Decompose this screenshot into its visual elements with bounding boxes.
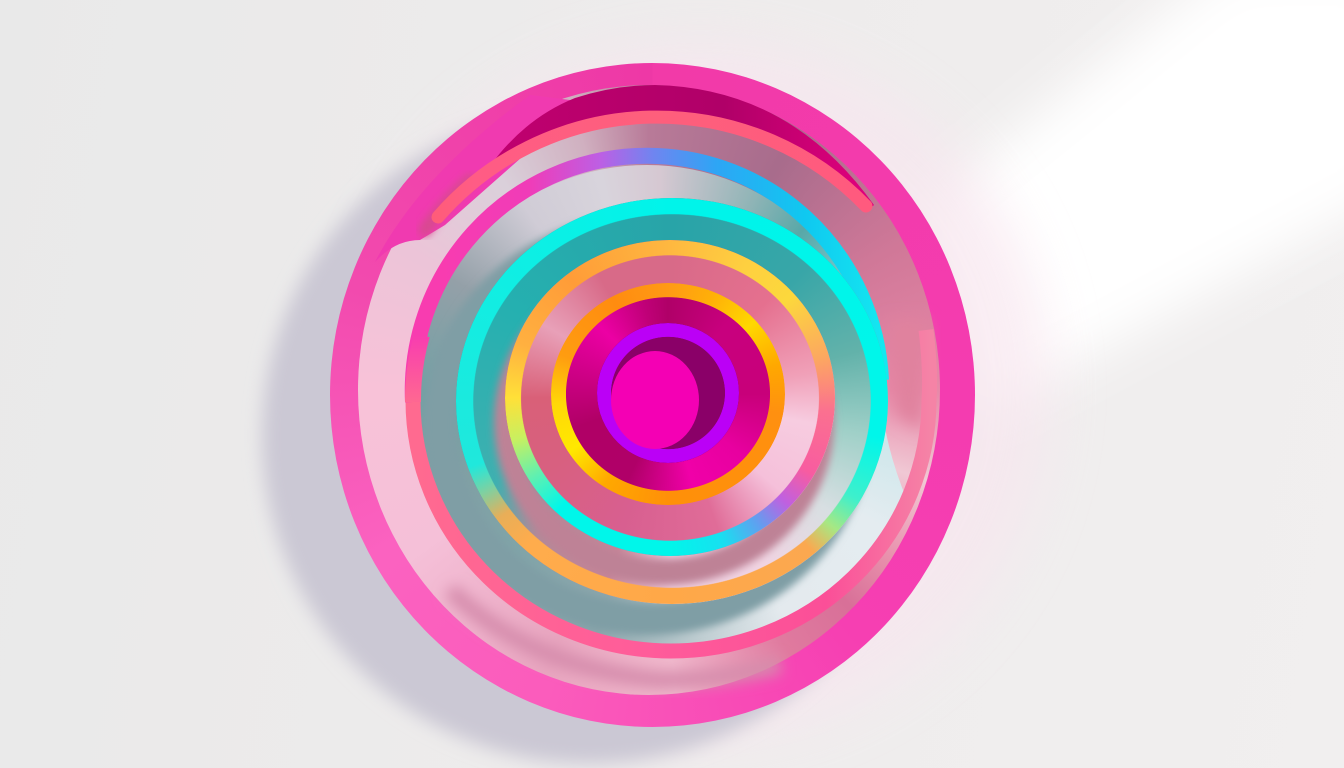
dark well inside purple ring: [597, 323, 739, 463]
outer pink ring: [330, 63, 975, 727]
spiral upper band: [413, 156, 881, 402]
third loop: orange and yellow: [551, 283, 785, 505]
magenta core disc: [558, 290, 778, 498]
spiral lower band: [413, 330, 930, 651]
coral top arc: [438, 117, 866, 217]
inside of second loop: [505, 240, 835, 556]
inside of first loop: [456, 198, 888, 604]
hollow lower shadow: [450, 590, 780, 680]
purple ring: [597, 323, 739, 463]
first loop: cyan and orange: [456, 198, 888, 604]
spiral colour seam: [413, 335, 422, 402]
inside of spiral: [420, 165, 904, 644]
pink patch right of cyan: [888, 320, 926, 430]
dark magenta crescent: [490, 85, 874, 212]
shadow below the first loop: [440, 229, 856, 619]
arc shadow: [425, 180, 470, 230]
magenta center: [611, 351, 699, 449]
ring hollow: [358, 85, 940, 695]
second loop: rainbow: [505, 240, 835, 556]
pink fill behind arc end: [375, 95, 570, 262]
